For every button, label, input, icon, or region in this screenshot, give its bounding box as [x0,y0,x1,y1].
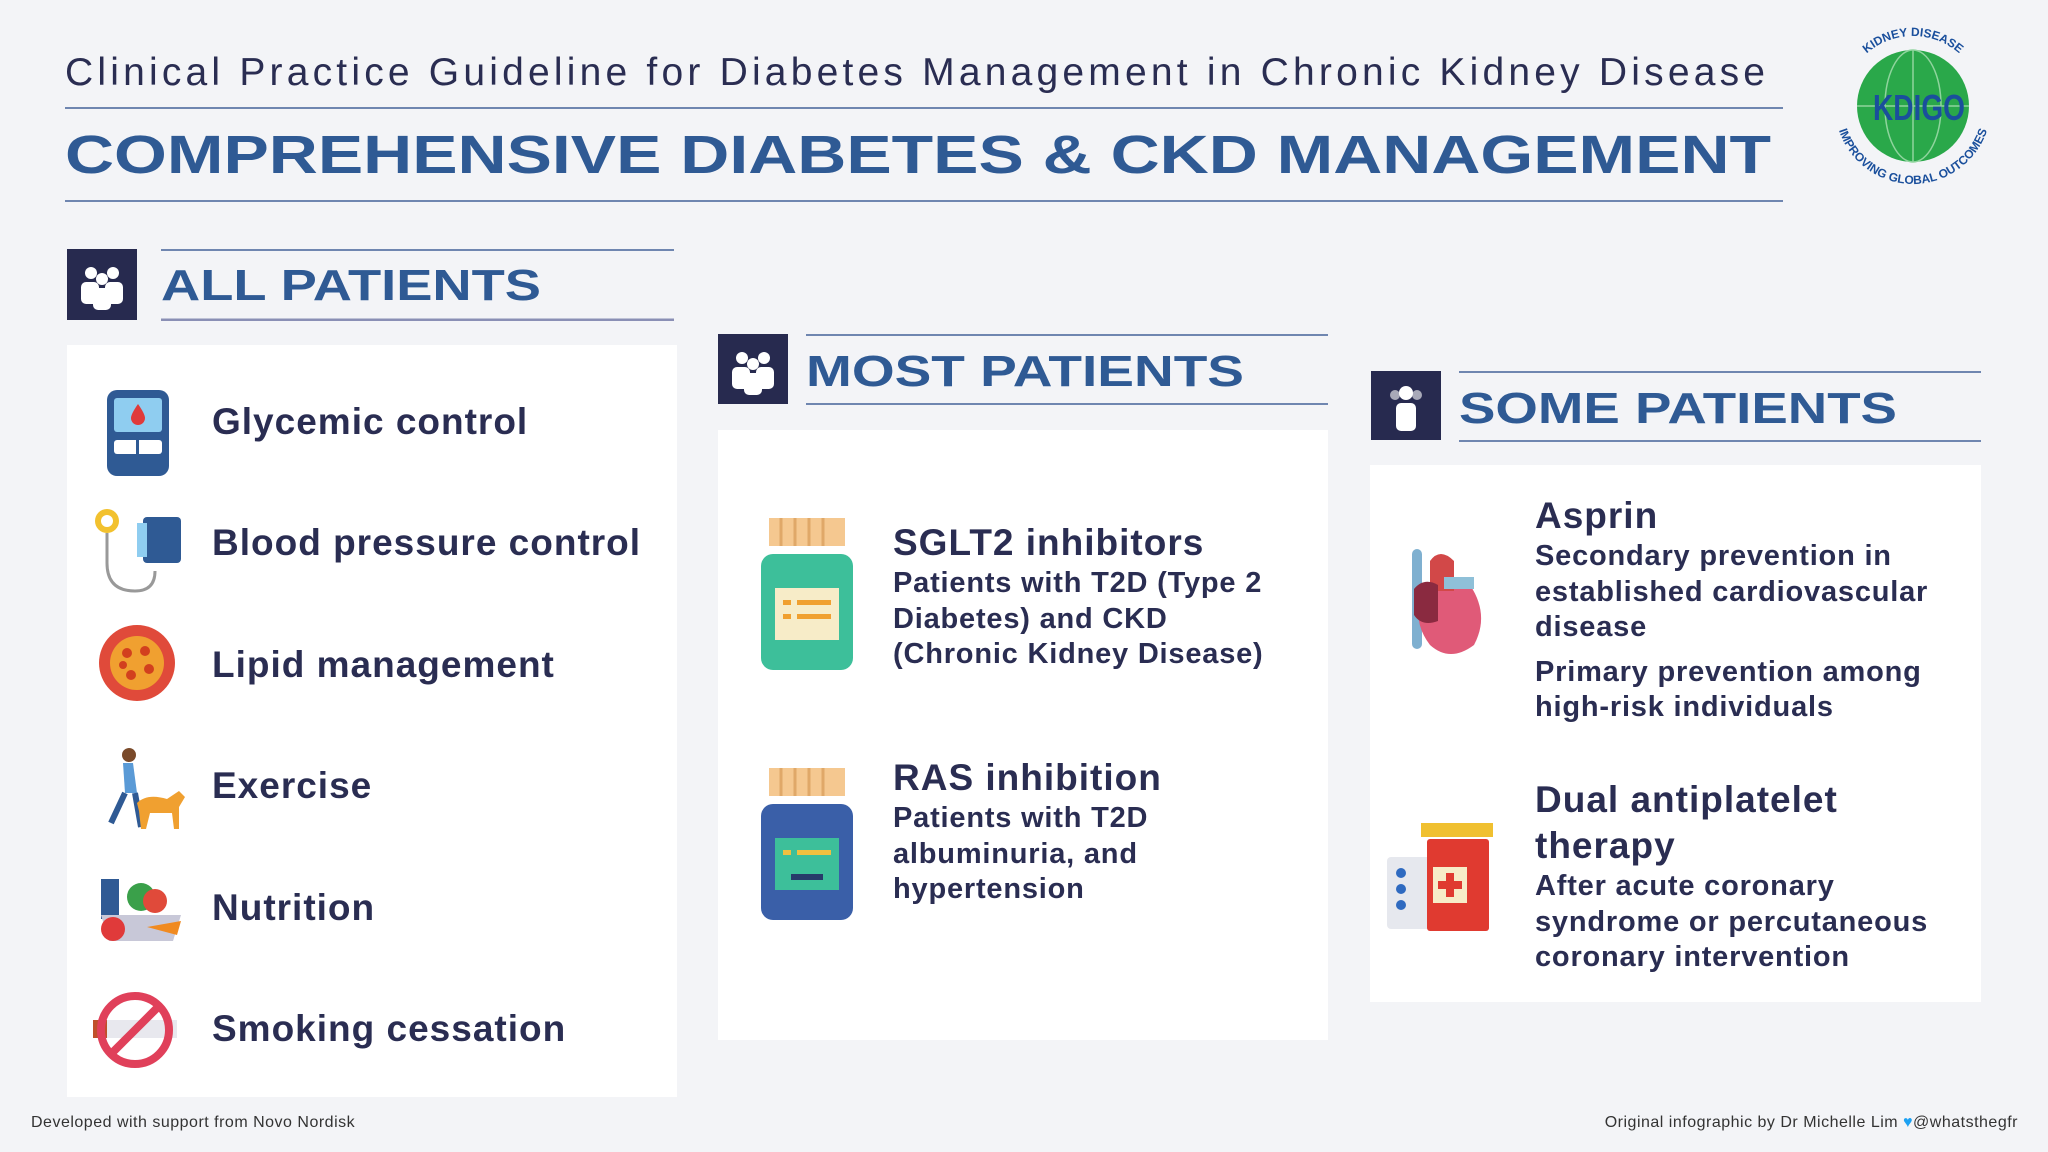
section header: some patients [1371,371,1981,442]
text: SGLT2 [893,522,1264,670]
icon: green pill bottle [761,518,853,670]
panel: all patients [67,345,677,1097]
icon: person [1371,371,1441,440]
text: glycemic: Glycemic control [212,401,528,442]
icon: glucometer [107,390,169,476]
section header: all patients: ALL PATIENTS [161,261,541,310]
text: aspirin: disease [1535,611,1647,643]
text: dual antiplatelet: Dual antiplatelet [1535,779,1838,820]
text: SGLT2: SGLT2 inhibitors [893,522,1204,563]
logo: KDIGO: KIDNEY DISEASE [1862,28,1964,54]
icon: no smoking [93,992,177,1068]
text: SGLT2: (Chronic Kidney Disease) [893,638,1264,670]
icon: red pill bottle [1387,823,1493,931]
icon: heart [1412,549,1482,654]
text: aspirin: established cardiovascular [1535,576,1928,608]
text: exercise: Exercise [212,765,372,806]
icon: people group [718,334,788,404]
text: aspirin [1535,495,1928,723]
footer: right credit: Original infographic by Dr Michelle Lim ♥@whatsthegfr [1605,1114,2018,1131]
logo: KDIGO: KDIGO [1873,87,1965,128]
text: RAS: albuminuria, and [893,838,1138,870]
text: dual antiplatelet: After acute coronary [1535,870,1835,902]
section header: all patients [67,249,674,321]
header titles [65,51,1783,202]
section header: most patients: MOST PATIENTS [806,347,1244,396]
text: aspirin: Asprin [1535,495,1658,536]
main title: COMPREHENSIVE DIABETES & CKD MANAGEMENT [65,125,1771,185]
logo: KDIGO [1839,28,1986,184]
icon: blood pressure [95,509,181,592]
text: RAS [893,757,1162,905]
logo: KDIGO: IMPROVING GLOBAL OUTCOMES [1839,128,1986,184]
text: RAS: hypertension [893,873,1085,905]
icon: lipid [99,625,175,701]
text: aspirin: Primary prevention among [1535,656,1922,688]
text: aspirin: high-risk individuals [1535,691,1834,723]
text: nutrition: Nutrition [212,887,375,928]
text: dual antiplatelet: therapy [1535,825,1676,866]
icon: nutrition [101,879,181,941]
icon: exercise [108,748,185,829]
icon: blue pill bottle [761,768,853,920]
subtitle: Clinical Practice Guideline for Diabetes Management in Chronic Kidney Disease [65,51,1765,94]
footer: left credit: Developed with support from Novo Nordisk [31,1114,355,1131]
panel: some patients [1370,465,1981,1002]
text: dual antiplatelet: coronary intervention [1535,941,1850,973]
icon: people group [67,249,137,320]
text: RAS: Patients with T2D [893,802,1148,834]
text: aspirin: Secondary prevention in [1535,540,1892,572]
panel: most patients [718,430,1328,1040]
text: smoking: Smoking cessation [212,1008,566,1049]
text: SGLT2: Diabetes) and CKD [893,602,1168,634]
text: SGLT2: Patients with T2D (Type 2 [893,567,1262,599]
text: dual antiplatelet [1535,779,1928,973]
text: RAS: RAS inhibition [893,757,1162,798]
section header: some patients: SOME PATIENTS [1459,384,1897,433]
text: blood pressure: Blood pressure control [212,522,641,563]
text: lipid: Lipid management [212,644,555,685]
section header: most patients [718,334,1328,405]
text: dual antiplatelet: syndrome or percutaneous [1535,906,1928,938]
